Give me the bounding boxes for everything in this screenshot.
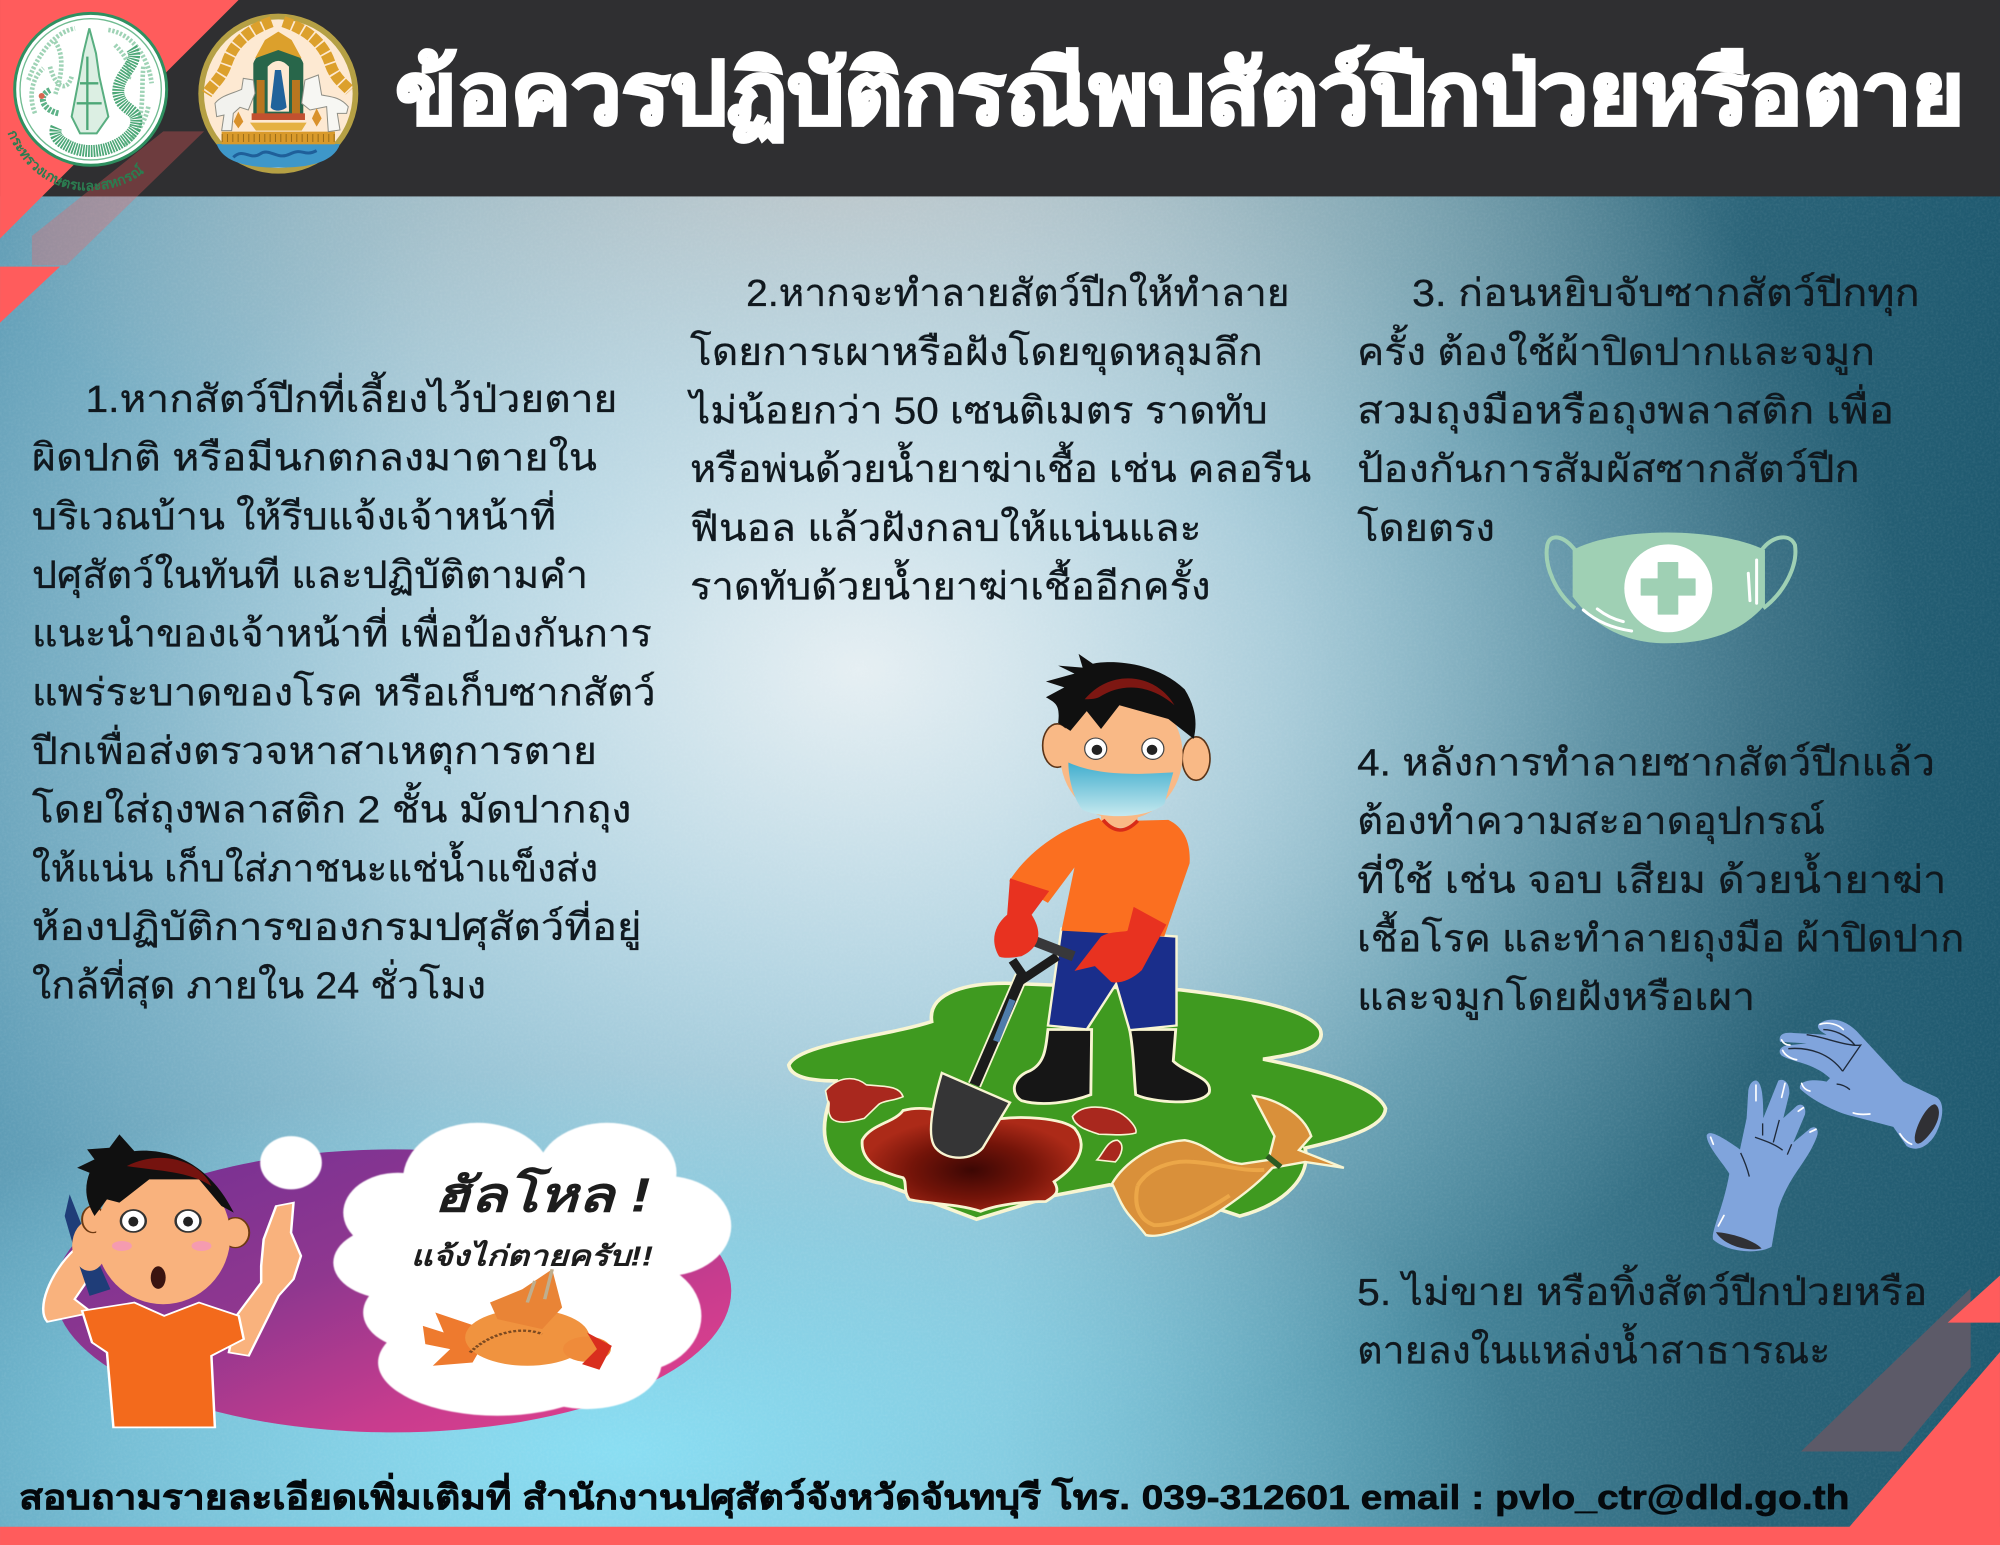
paragraph 5 text <box>1357 1264 1927 1372</box>
paragraph 1 text: ปศุสัตว์ในทันที และปฏิบัติตามคำ <box>32 553 588 598</box>
man hair <box>77 1134 234 1216</box>
dead chicken <box>423 1269 612 1370</box>
top-left red corner triangle <box>0 0 239 239</box>
footer contact line: 039-312601 email : pvlo_ctr@dld.go.th <box>1142 1479 1849 1517</box>
surgical mask on man <box>1068 763 1173 816</box>
purple pink oval <box>55 1149 731 1432</box>
man arms <box>43 1203 301 1356</box>
paragraph 4 text: ที่ใช้ เช่น จอบ เสียม ด้วยน้ำยาฆ่า <box>1357 852 1946 902</box>
translucent grey corner shape <box>1801 1288 1971 1452</box>
left glove <box>994 878 1049 958</box>
phone hand <box>72 1221 107 1271</box>
right glove <box>1074 907 1166 982</box>
paragraph 1 text <box>31 371 656 1009</box>
man eyes <box>121 1210 200 1232</box>
face <box>1060 689 1183 820</box>
hair highlight <box>1085 678 1174 705</box>
paragraph 2 text: 2.หากจะทำลายสัตว์ปีกให้ทำลาย <box>746 271 1290 315</box>
header bar <box>0 0 2000 196</box>
waste bag <box>1112 1096 1344 1236</box>
paragraph 1 text: ใกล้ที่สุด ภายใน 24 ชั่วโมง <box>32 959 486 1009</box>
paragraph 4 text: และจมูกโดยฝังหรือเผา <box>1357 975 1755 1020</box>
icon: surgical face mask <box>1547 532 1795 643</box>
paragraph 4 text: 4. หลังการทำลายซากสัตว์ปีกแล้ว <box>1357 741 1935 784</box>
paragraph 5 text: 5. ไม่ขาย หรือทิ้งสัตว์ปีกป่วยหรือ <box>1357 1264 1927 1314</box>
shirt <box>1009 818 1190 937</box>
logo: department of livestock seal <box>15 13 167 165</box>
right boot <box>1130 1029 1210 1102</box>
paragraph 3 text: ป้องกันการสัมผัสซากสัตว์ปีก <box>1357 448 1860 491</box>
paragraph 1 text: โดยใส่ถุงพลาสติก 2 ชั้น มัดปากถุง <box>32 782 631 833</box>
icon: blue rubber gloves <box>1707 1020 1942 1251</box>
paragraph 2 text: หรือพ่นด้วยน้ำยาฆ่าเชื้อ เช่น คลอรีน <box>690 441 1311 491</box>
illustration: man phoning about a dead chicken <box>43 1123 731 1432</box>
paragraph 1 text: บริเวณบ้าน ให้รีบแจ้งเจ้าหน้าที่ <box>32 489 556 538</box>
paragraph 1 text: ปีกเพื่อส่งตรวจหาสาเหตุการตาย <box>31 724 597 774</box>
paragraph 3 text: 3. ก่อนหยิบจับซากสัตว์ปีกทุก <box>1412 272 1920 316</box>
title: ข้อควรปฏิบัติกรณีพบสัตว์ปีกป่วยหรือตาย <box>395 46 1964 144</box>
paragraph 2 text: ฟีนอล แล้วฝังกลบให้แน่นและ <box>690 506 1202 550</box>
footer contact line <box>19 1472 1849 1519</box>
translucent corner parallelogram <box>32 131 204 265</box>
green ground patch <box>789 983 1386 1219</box>
footer contact line: สอบถามรายละเอียดเพิ่มเติมที่ สำนักงานปศุสัตว์จังหวัดจันทบุรี โทร. <box>19 1472 1130 1519</box>
dirt clumps <box>826 1079 1136 1162</box>
man face <box>96 1168 230 1304</box>
paragraph 1 text: ผิดปกติ หรือมีนกตกลงมาตายใน <box>32 436 597 480</box>
collar <box>1103 820 1138 830</box>
paragraph 1 text: ให้แน่น เก็บใส่ภาชนะแช่น้ำแข็งส่ง <box>32 840 598 890</box>
eyes <box>1085 738 1164 759</box>
paragraph 2 text <box>687 271 1311 608</box>
paragraph 2 text: ไม่น้อยกว่า 50 เซนติเมตร ราดทับ <box>687 388 1268 432</box>
paragraph 1 text: แนะนำของเจ้าหน้าที่ เพื่อป้องกันการ <box>32 607 652 656</box>
paragraph 2 text: โดยการเผาหรือฝังโดยขุดหลุมลึก <box>690 330 1263 375</box>
phone <box>65 1194 110 1296</box>
paragraph 5 text: ตายลงในแหล่งน้ำสาธารณะ <box>1357 1322 1830 1372</box>
bottom red strip <box>0 1527 2000 1545</box>
bottom-right red triangle <box>1849 1352 2000 1545</box>
neck <box>1101 808 1138 828</box>
small right red triangle <box>1948 1275 2000 1323</box>
shovel <box>931 940 1074 1158</box>
thought cloud <box>260 1123 731 1416</box>
paragraph 3 text <box>1357 272 1920 550</box>
man hair highlight <box>127 1158 211 1186</box>
man shirt <box>82 1303 244 1427</box>
speech text report: แจ้งไก่ตายครับ!! <box>411 1239 653 1271</box>
paragraph 1 text: 1.หากสัตว์ปีกที่เลี้ยงไว้ป่วยตาย <box>85 371 617 421</box>
paragraph 4 text: เชื้อโรค และทำลายถุงมือ ผ้าปิดปาก <box>1357 911 1964 962</box>
ears <box>1043 724 1072 767</box>
logo: ministry of agriculture seal <box>198 14 358 174</box>
trousers <box>1048 929 1177 1030</box>
paragraph 3 text: ครั้ง ต้องใช้ผ้าปิดปากและจมูก <box>1357 324 1875 375</box>
illustration: man digging a burial pit <box>789 654 1386 1236</box>
paragraph 4 text <box>1357 741 1964 1020</box>
logo caption arc text: กระทรวงเกษตรและสหกรณ์ <box>8 130 144 191</box>
paragraph 3 text: สวมถุงมือหรือถุงพลาสติก เพื่อ <box>1357 383 1894 433</box>
speech text hello: ฮัลโหล ! <box>434 1167 651 1223</box>
man ears <box>82 1206 249 1248</box>
paragraph 1 text: แพร่ระบาดของโรค หรือเก็บซากสัตว์ <box>32 669 656 714</box>
burial pit <box>862 1108 1081 1211</box>
small red triangle <box>0 267 60 323</box>
man mouth and cheeks <box>112 1241 211 1289</box>
left boot <box>1014 1029 1092 1103</box>
paragraph 3 text: โดยตรง <box>1357 506 1495 550</box>
hair <box>1046 654 1196 739</box>
paragraph 1 text: ห้องปฏิบัติการของกรมปศุสัตว์ที่อยู่ <box>32 900 642 950</box>
paragraph 4 text: ต้องทำความสะอาดอุปกรณ์ <box>1357 800 1825 844</box>
paragraph 2 text: ราดทับด้วยน้ำยาฆ่าเชื้ออีกครั้ง <box>690 558 1210 608</box>
